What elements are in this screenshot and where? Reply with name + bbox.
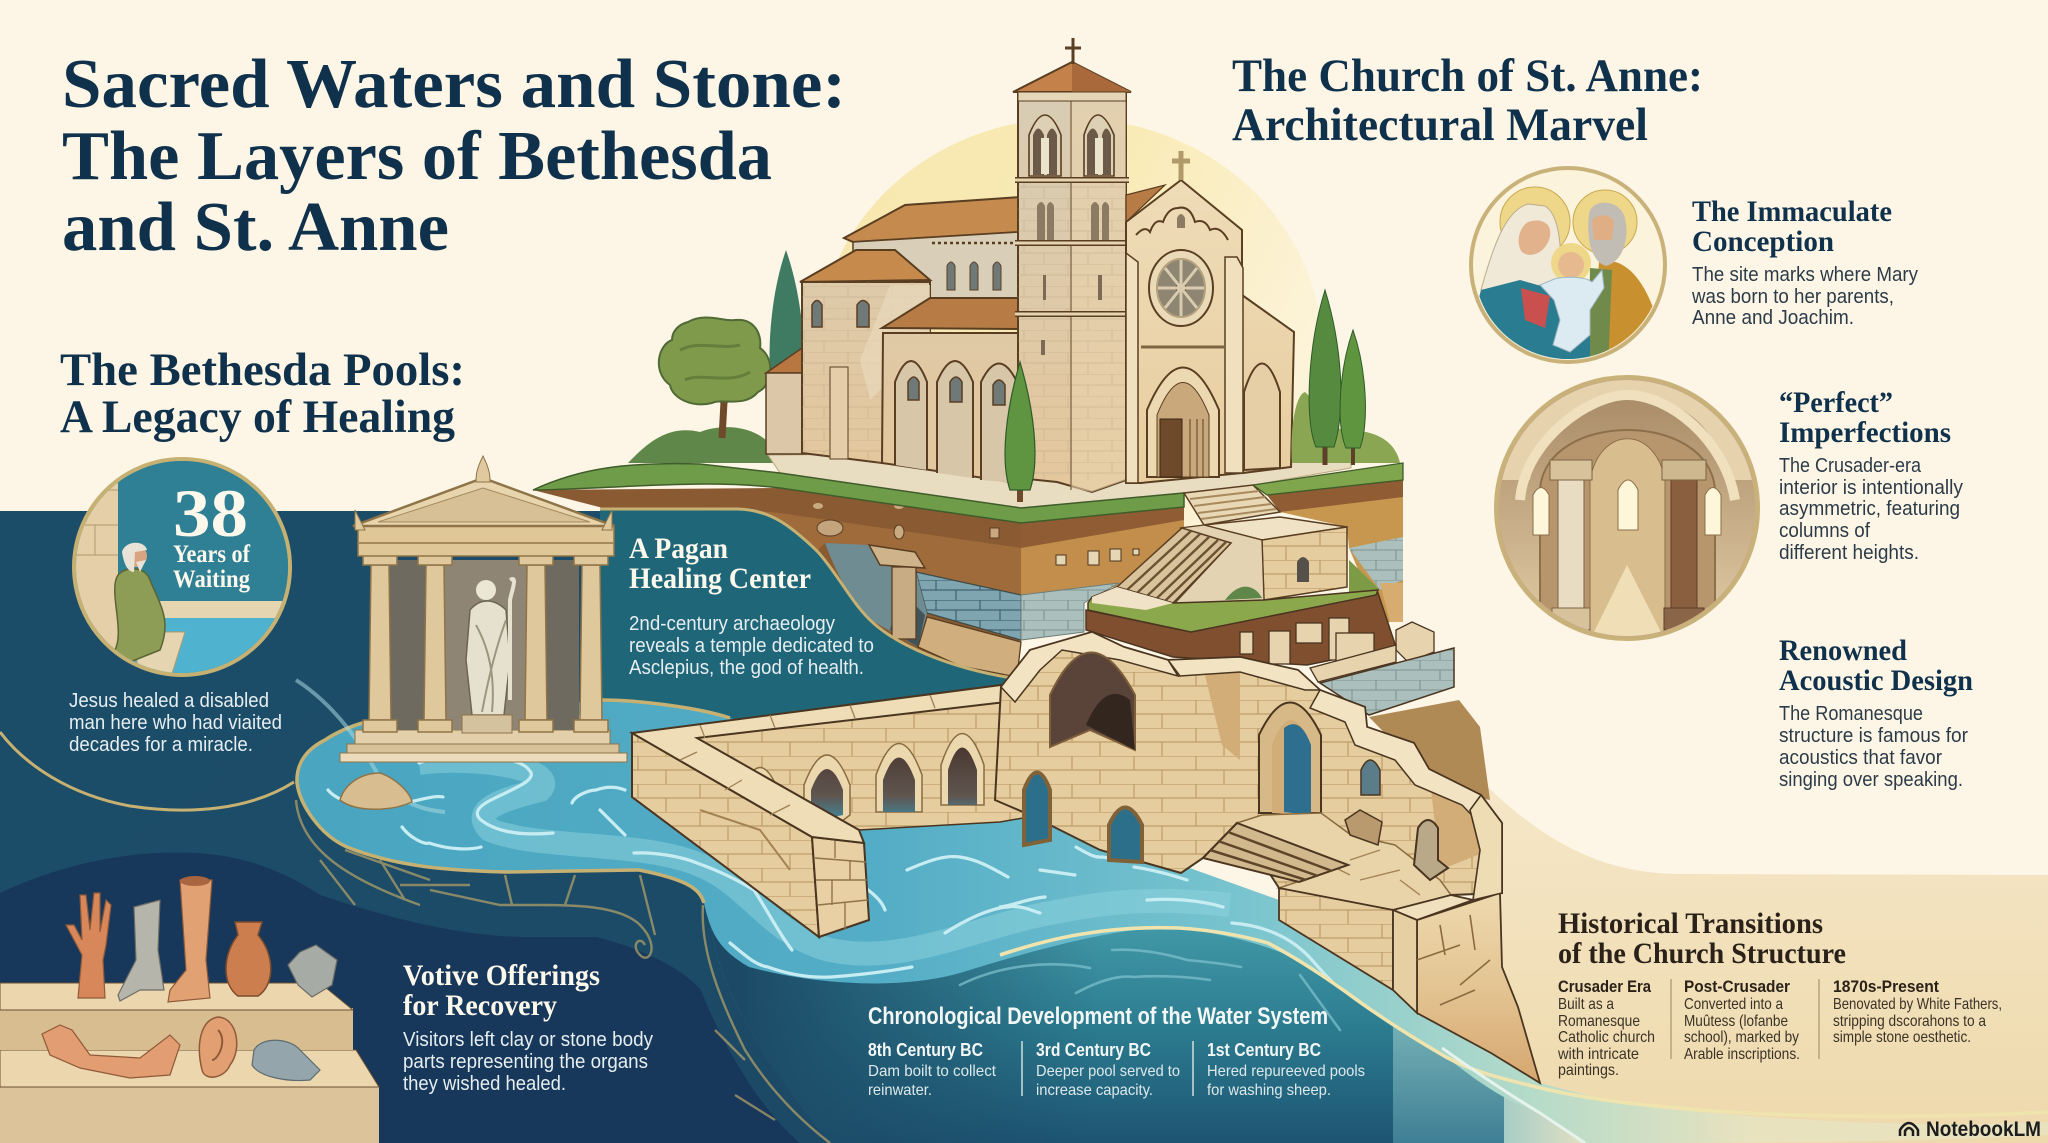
faint stone channel lines	[296, 800, 830, 1143]
rose window	[1149, 250, 1213, 326]
ruin stairs	[1203, 823, 1348, 882]
column: Post-Crusader: Converted into a	[1684, 996, 1783, 1013]
text block: Perfect Imperfections: The Crusader-era	[1779, 455, 1922, 477]
shelf steps	[0, 983, 379, 1143]
column: 8th century	[868, 1040, 997, 1099]
text block: Renowned Acoustic Design: The Romanesque	[1779, 703, 1923, 725]
column: 1870s-Present: 1870s-Present	[1833, 977, 1939, 996]
text block: Renowned Acoustic Design: Renowned	[1779, 634, 1907, 667]
text block: A Pagan Healing Center: Healing Center	[629, 562, 811, 595]
medallion: Perfect Imperfections interior	[1495, 375, 1760, 640]
text block: Immaculate Conception: Anne and Joachim.	[1692, 307, 1854, 329]
heading: Church of St. Anne	[1232, 50, 1703, 151]
historical heading: Historical Transitions	[1558, 907, 1823, 940]
cliff corner	[1393, 893, 1540, 1083]
nave clerestory	[853, 232, 1020, 300]
front wall face	[632, 733, 869, 937]
historical heading: of the Church Structure	[1558, 937, 1846, 970]
central ruin block	[995, 632, 1502, 910]
text block: Renowned Acoustic Design: Acoustic Design	[1779, 664, 1973, 697]
column: Post-Crusader	[1684, 977, 1800, 1063]
text block: Votive Offerings: for Recovery	[403, 989, 557, 1022]
right bushes	[1292, 392, 1400, 463]
chronological heading: Chronological Development of the Water System	[868, 1003, 1328, 1030]
title: and St. Anne	[62, 189, 449, 266]
mist stream from medallion	[296, 680, 445, 812]
stone pedestal	[1345, 810, 1448, 880]
gold line: pagan panel edge	[600, 509, 1012, 678]
38 years text: Years of	[173, 541, 251, 568]
text block: Renowned Acoustic Design: acoustics that favor	[1779, 747, 1942, 769]
heading: Bethesda pools	[60, 344, 465, 443]
panel: historical transitions of the church structure	[1557, 907, 2002, 1079]
text block: Immaculate Conception: The site marks where Mary	[1692, 264, 1918, 286]
gray retaining wall and cliff	[1320, 648, 1490, 800]
column: Crusader Era: Romanesque	[1558, 1013, 1640, 1030]
text block: Perfect Imperfections: asymmetric, featuring	[1779, 498, 1960, 520]
green terrace	[533, 463, 1403, 523]
church complex illustration	[533, 38, 1490, 800]
historical heading	[1558, 907, 1846, 970]
temple interior	[389, 560, 579, 730]
water highlights	[328, 756, 1339, 987]
cypress tree left	[770, 250, 803, 372]
front cypress	[1005, 362, 1035, 502]
column: Post-Crusader: Arable inscriptions.	[1684, 1046, 1800, 1063]
text block: Jesus healed: man here who had viaited	[69, 712, 282, 734]
back wall with arches	[697, 700, 1040, 830]
text block: Perfect Imperfections: columns of	[1779, 520, 1870, 542]
gray stone fragment	[288, 945, 337, 997]
text block: A Pagan Healing Center: Asclepius, the god of health.	[629, 657, 864, 679]
clay ear	[199, 1017, 237, 1077]
title	[62, 46, 846, 266]
upper plaza	[768, 450, 1351, 508]
column: 1870s-Present: Benovated by White Fathers,	[1833, 996, 2002, 1013]
column: 1st century: Hered repureeved pools	[1207, 1063, 1365, 1080]
text block: Perfect Imperfections	[1779, 386, 1963, 564]
column: 3rd century: Deeper pool served to	[1036, 1063, 1180, 1080]
temple steps	[340, 715, 627, 762]
buried cave and column	[825, 543, 1021, 677]
ribbon edge	[1000, 928, 2048, 1116]
text block: A Pagan Healing Center: 2nd-century archaeology	[629, 613, 835, 635]
column: Crusader Era: Catholic church	[1558, 1029, 1655, 1046]
temple pediment	[353, 456, 614, 530]
earth: left face	[533, 488, 1021, 678]
column: 1870s-Present	[1833, 977, 2002, 1046]
Joachim	[1591, 262, 1652, 356]
front lower wall	[1279, 888, 1393, 990]
panel: navy pool background	[0, 511, 900, 1143]
panel: historical transitions background	[1470, 770, 2048, 1143]
text block: Immaculate Conception	[1691, 195, 1918, 329]
right cypresses	[1309, 290, 1365, 465]
heading: Bethesda pools: A Legacy of Healing	[60, 391, 455, 443]
small carved stones	[1240, 618, 1434, 682]
text block: Immaculate Conception: Conception	[1692, 225, 1834, 258]
nave upper roof	[844, 197, 1020, 242]
panel: chronological development of the water system	[868, 1003, 1365, 1099]
clay hand	[66, 893, 111, 998]
38 years text: 38	[173, 475, 248, 551]
column: Crusader Era: with intricate	[1557, 1046, 1639, 1063]
column: 8th century: 8th Century BC	[868, 1040, 983, 1060]
main door	[1147, 368, 1219, 477]
church facade	[1126, 151, 1294, 483]
text block: Votive Offerings: Votive Offerings	[403, 959, 600, 992]
water pool gold edge	[297, 700, 730, 903]
text block: Perfect Imperfections: Imperfections	[1779, 416, 1951, 449]
column: Post-Crusader: Muûtess (lofanbe	[1684, 1013, 1788, 1030]
panel: votive dark area	[0, 852, 800, 1143]
column: Crusader Era: Built as a	[1558, 996, 1614, 1013]
text block: Perfect Imperfections: interior is intentionally	[1779, 477, 1963, 499]
text block: Votive Offerings: they wished healed.	[403, 1073, 566, 1095]
column: 3rd century	[1036, 1040, 1180, 1099]
Mary	[1481, 204, 1561, 290]
38 years text	[173, 475, 251, 593]
medallion: Immaculate Conception	[1471, 168, 1668, 372]
title: The Layers of Bethesda	[62, 118, 772, 195]
rock in water	[340, 773, 412, 809]
olive tree	[628, 317, 777, 463]
side arch	[1244, 364, 1280, 470]
heading: Bethesda pools: The Bethesda Pools:	[60, 344, 465, 396]
upper stairs	[1184, 485, 1280, 525]
column: Post-Crusader: Post-Crusader	[1684, 977, 1790, 996]
text block: Immaculate Conception: was born to her parents,	[1691, 286, 1894, 308]
text block: A Pagan Healing Center: reveals a temple dedicated to	[629, 635, 874, 657]
clay leg	[168, 876, 212, 1002]
low west wing	[766, 348, 806, 454]
stone block	[1173, 517, 1347, 605]
pool wall ruins	[632, 632, 1540, 1083]
medallion: 38 years of waiting	[70, 455, 298, 680]
text block: Jesus healed: Jesus healed a disabled	[69, 690, 269, 712]
text block: Renowned Acoustic Design: singing over speaking.	[1779, 769, 1963, 791]
text block: Votive Offerings: parts representing the organs	[403, 1051, 648, 1073]
column: 3rd century: 3rd Century BC	[1036, 1040, 1151, 1060]
text block: Renowned Acoustic Design: structure is famous for	[1779, 725, 1968, 747]
column: 1870s-Present: simple stone oesthetic.	[1833, 1029, 1971, 1046]
stone leg	[118, 900, 164, 1001]
lower stairs	[1117, 528, 1231, 603]
large dark arch	[1050, 652, 1135, 750]
text block: A Pagan Healing Center	[629, 532, 874, 679]
column: Crusader Era	[1557, 977, 1655, 1079]
38 years text: Waiting	[173, 566, 250, 593]
text block: Perfect Imperfections: “Perfect”	[1779, 386, 1893, 419]
title: Sacred Waters and Stone:	[62, 46, 846, 123]
nave aisle with arcade	[882, 298, 1020, 483]
water pool	[297, 700, 2048, 1143]
heading: Church of St. Anne: The Church of St. Anne:	[1232, 50, 1703, 102]
clay arm	[42, 1025, 180, 1078]
middle terrace	[1086, 587, 1434, 682]
column: Crusader Era: Crusader Era	[1558, 977, 1651, 996]
text block: Immaculate Conception: The Immaculate	[1692, 195, 1892, 228]
column: 8th century: Dam boilt to collect	[868, 1063, 997, 1080]
gold line: healing panel edge	[0, 732, 294, 810]
lower arches	[1024, 772, 1142, 862]
door arch	[1259, 702, 1380, 815]
earth: front face right	[1021, 507, 1184, 595]
column: 1st century: 1st Century BC	[1207, 1040, 1321, 1060]
curved outer wall cap	[1470, 795, 1502, 900]
votive offerings shelf	[0, 876, 379, 1143]
heading: Church of St. Anne: Architectural Marvel	[1232, 99, 1648, 151]
wall top surface	[632, 685, 1015, 843]
temple of Asclepius	[340, 456, 627, 762]
text block: Votive Offerings: Visitors left clay or stone body	[403, 1029, 653, 1051]
text block: A Pagan Healing Center: A Pagan	[629, 532, 728, 565]
ruin floor	[1237, 813, 1451, 910]
text block: Renowned Acoustic Design	[1779, 634, 1973, 791]
lower water lines	[960, 950, 1340, 1030]
panel: chronological water system background	[711, 910, 1585, 1143]
temple entablature	[358, 525, 614, 556]
column: 1st century	[1207, 1040, 1365, 1099]
apse	[800, 250, 930, 463]
column: 8th century: reinwater.	[868, 1082, 932, 1099]
column: 1st century: for washing sheep.	[1207, 1082, 1331, 1099]
text block: Jesus healed: decades for a miracle.	[69, 734, 253, 756]
child	[1551, 243, 1591, 278]
buried blue stone wall	[916, 572, 1119, 640]
clay vase	[226, 922, 271, 996]
panel: pagan healing center background	[600, 509, 1012, 740]
temple columns	[363, 555, 608, 732]
bell tower	[1013, 38, 1131, 492]
column: Post-Crusader: school), marked by	[1684, 1029, 1799, 1046]
sun halo	[818, 118, 1322, 582]
light channel	[419, 761, 1230, 954]
text block: Jesus healed	[69, 690, 282, 756]
stone organ	[252, 1040, 320, 1080]
text block: Votive Offerings	[403, 959, 653, 1095]
earth: upper right	[1267, 480, 1403, 622]
statue of Asclepius	[462, 579, 514, 733]
column: Crusader Era: paintings.	[1558, 1062, 1619, 1079]
text block: Perfect Imperfections: different heights.	[1779, 542, 1919, 564]
column: 3rd century: increase capacity.	[1036, 1082, 1153, 1099]
column: 1870s-Present: stripping dscorahons to a	[1833, 1013, 1986, 1030]
